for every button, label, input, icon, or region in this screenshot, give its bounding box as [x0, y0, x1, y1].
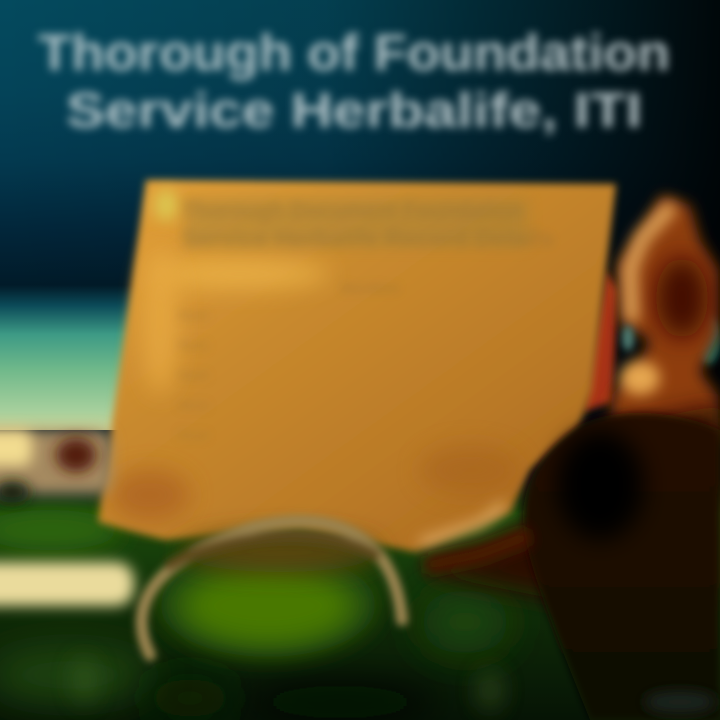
figure: bright base glow: [620, 361, 660, 395]
green bowl halo: [160, 553, 376, 657]
document heading text: [182, 197, 554, 297]
document heading text: Thorough Document Foundation: [182, 197, 522, 224]
figure: teal-grey gap: [622, 325, 634, 351]
document body column: Item: [178, 427, 209, 444]
figure: dark maroon body: [656, 258, 708, 338]
document panel: golden parchment: [98, 180, 616, 552]
document body column: Item: [178, 367, 209, 384]
foreground ground: green foliage: [0, 480, 720, 720]
red edge behind document: [582, 270, 618, 412]
document heading text: Service Herbalife Record Details: [182, 225, 554, 251]
title: [38, 24, 670, 138]
green bowl interior: [186, 570, 350, 642]
left shells on shore: [0, 430, 112, 503]
document shade: right lower area: [420, 445, 520, 495]
title: Thorough of Foundation: [38, 24, 670, 81]
document body column: Item: [178, 337, 209, 354]
figure: orange statuette at right: [610, 195, 718, 440]
document shade: lower-left corner: [110, 469, 190, 521]
document heading text: Section: [340, 280, 400, 297]
document heading block: [184, 198, 529, 248]
document glow: band under heading: [150, 260, 330, 288]
grey shadow bottom right corner: [644, 692, 716, 712]
dark round pot: [420, 405, 720, 720]
figure: pale highlight streak: [630, 210, 668, 315]
document body column: Item: [178, 397, 209, 414]
document glow: left highlight: [142, 245, 178, 395]
document body column: Item: [178, 307, 209, 324]
document edge: bright lower right fold: [420, 505, 505, 544]
background: teal glimpse at right of figure: [696, 316, 720, 364]
bowl: brown upper interior: [180, 532, 380, 572]
cream plate at left: [0, 562, 134, 606]
bowl rim: curved ring: [142, 521, 402, 655]
title: Service Herbalife, ITI: [66, 84, 642, 138]
document glow: top-left highlight: [154, 189, 178, 221]
document body column: [178, 307, 209, 444]
background: turquoise sea horizon: [0, 285, 160, 430]
